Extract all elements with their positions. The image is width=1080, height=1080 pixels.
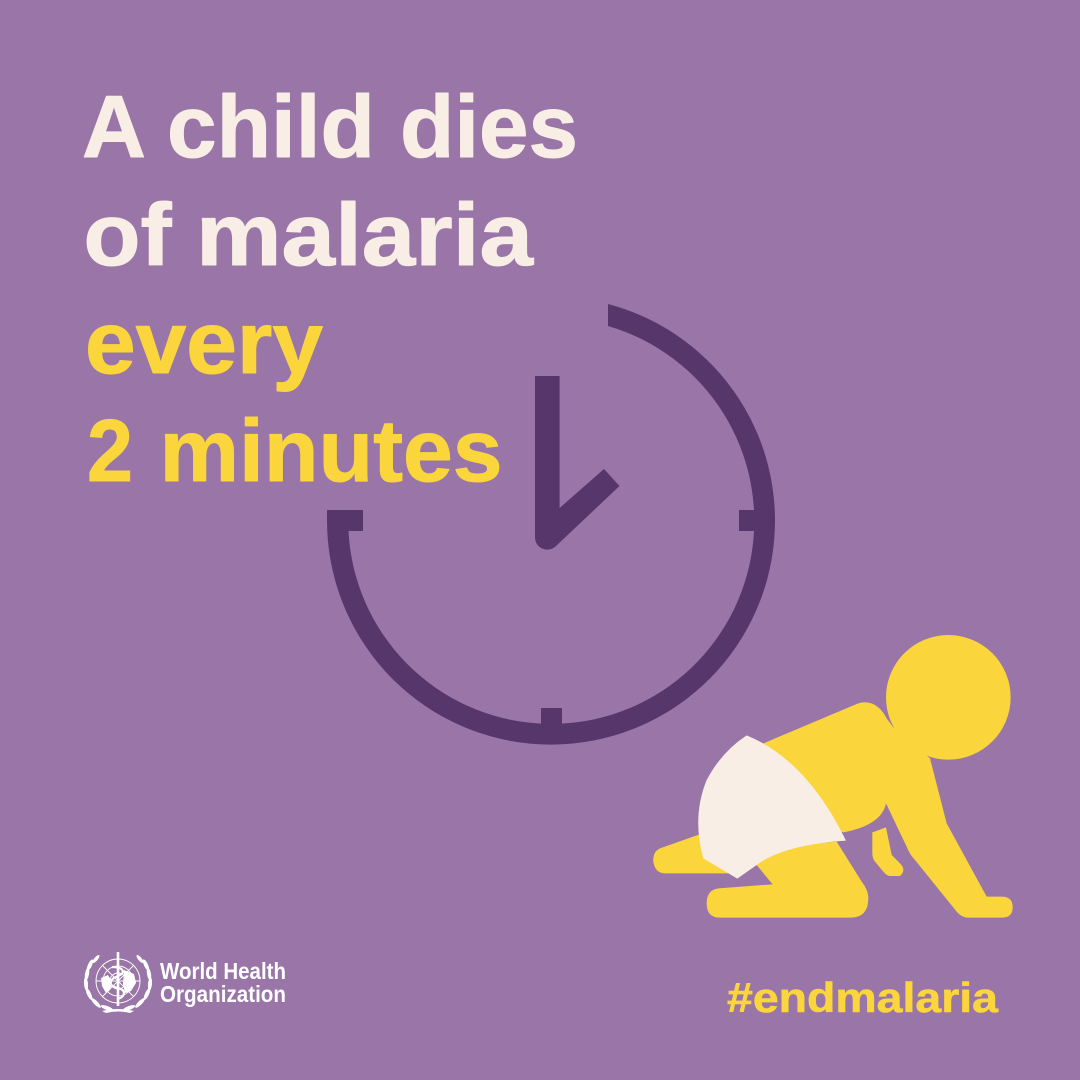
- title line: every: every: [85, 293, 323, 392]
- logo: World Health Organization: [83, 952, 286, 1013]
- hashtag: #endmalaria: [727, 974, 999, 1021]
- clock ring: [327, 304, 775, 745]
- clock hands: [535, 376, 620, 550]
- title line: of malaria: of: [84, 185, 172, 284]
- title line: A child dies: child: [167, 77, 375, 176]
- title line: of malaria: malaria: [196, 185, 534, 284]
- emblem staff and snake: [110, 952, 124, 1006]
- baby far arm: [872, 827, 903, 876]
- title: [82, 77, 578, 500]
- emblem laurel: [83, 954, 153, 1013]
- baby leg: [707, 842, 868, 918]
- title line: 2 minutes: minutes: [160, 401, 502, 500]
- WHO emblem: [83, 952, 153, 1013]
- title line: A child dies: dies: [400, 77, 578, 176]
- clock tick: bottom: [541, 708, 562, 727]
- nappy: [698, 735, 846, 879]
- baby head: [886, 635, 1011, 760]
- baby body and arm: [763, 702, 1013, 918]
- WHO wordmark: [160, 958, 286, 1007]
- title line: A child dies: A: [82, 77, 146, 176]
- icon: crawling baby: [653, 635, 1013, 918]
- WHO wordmark: Organization: [160, 981, 286, 1007]
- WHO wordmark: World Health: [160, 958, 286, 984]
- title line: of malaria: [84, 185, 534, 284]
- baby foot: [653, 834, 740, 873]
- clock tick: right: [739, 510, 757, 531]
- icon: clock: [327, 304, 775, 745]
- title line: A child dies: [82, 77, 578, 176]
- emblem globe: [96, 959, 140, 1003]
- title line: 2 minutes: 2: [87, 401, 133, 500]
